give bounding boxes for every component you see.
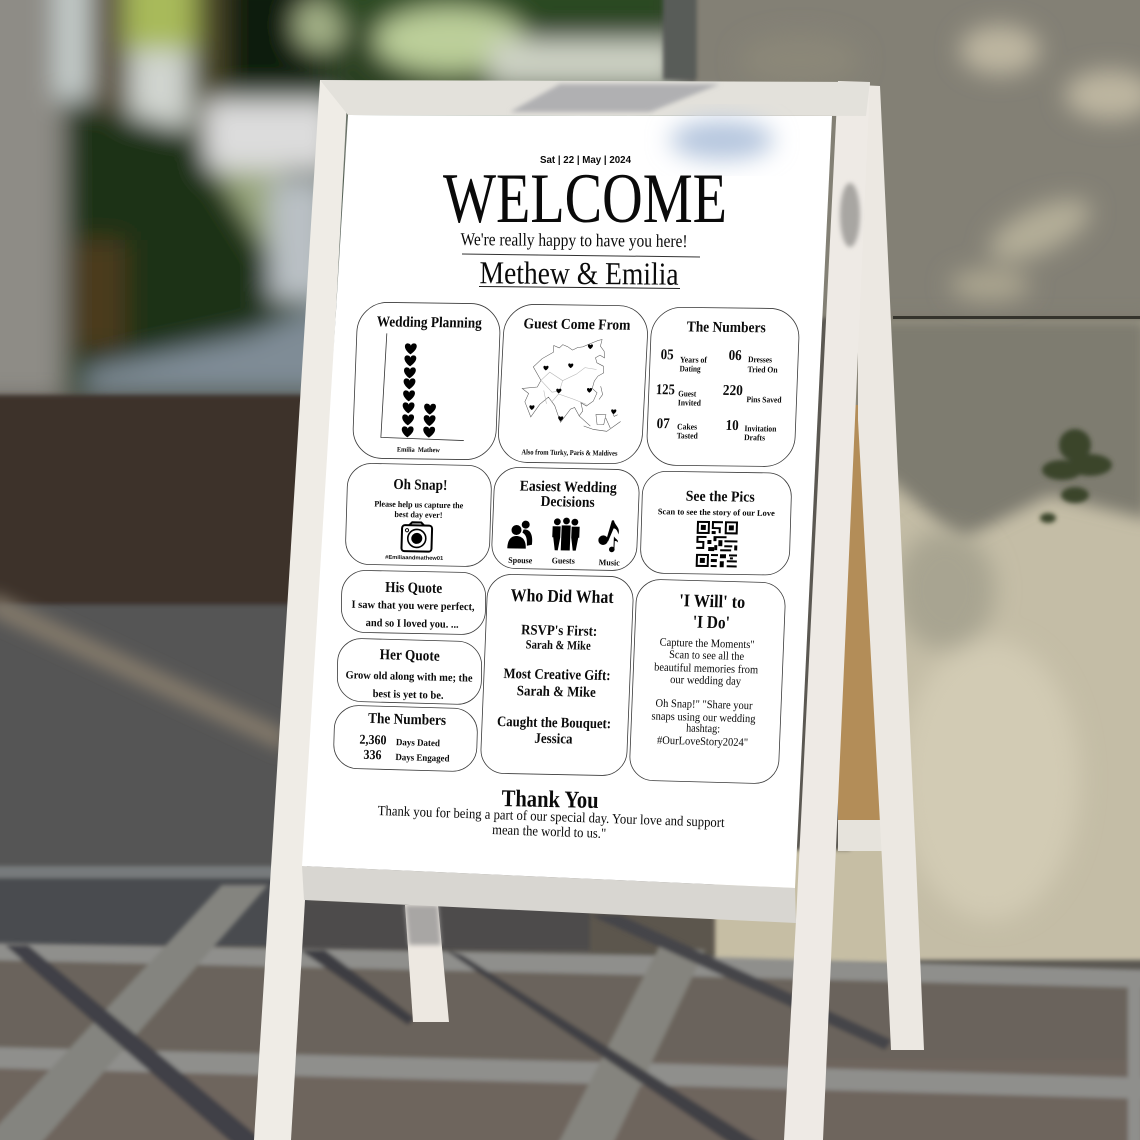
panel: I will to I do: beautiful memories from [654, 662, 758, 676]
panel: the numbers: The Numbers [686, 319, 766, 336]
panel: who did what: RSVP's First: [521, 622, 597, 640]
divider line [462, 254, 700, 257]
pavement [0, 885, 1140, 1140]
panel: guest come from: Guest Come From [523, 316, 631, 334]
panel: who did what: Sarah & Mike [525, 637, 591, 653]
panel: the numbers, days: The Numbers [368, 711, 446, 729]
panel: I will to I do: Scan to see all the [669, 649, 744, 663]
map of Asia [520, 338, 625, 431]
panel: the numbers: Cakes [677, 421, 698, 432]
panel: the numbers: Invited [678, 397, 701, 408]
panel: I will to I do: our wedding day [670, 674, 742, 688]
panel: who did what: Who Did What [510, 585, 614, 607]
panel: easiest wedding decisions: Music [599, 557, 620, 568]
panel: easiest wedding decisions: Decisions [540, 494, 595, 511]
panel: who did what [480, 574, 634, 776]
panel: oh snap: #Emiliaandmathew01 [385, 555, 443, 562]
panel: easiest wedding decisions: Guests [552, 555, 576, 566]
panel: the numbers: Tasted [677, 430, 698, 441]
name underline [479, 286, 680, 288]
panel: the numbers, days [333, 705, 478, 772]
moss on wall [1040, 429, 1112, 523]
panel: easiest wedding decisions: Spouse [508, 555, 533, 565]
icon: music [598, 520, 619, 552]
panel: his quote: and so I loved you. ... [366, 617, 459, 631]
chart: hearts pictogram [381, 333, 468, 441]
panel: the numbers, days: Days Dated [396, 738, 441, 749]
thank you message: mean the world to us." [492, 823, 606, 842]
title: welcome: WELCOME [443, 160, 727, 238]
panel: the numbers: Invitation [744, 423, 777, 434]
panel: the numbers: 06 [728, 348, 742, 364]
panel: see the pics: Scan to see the story of our Love [658, 506, 775, 518]
panel: the numbers: 07 [656, 416, 670, 432]
thank you heading: Thank You [501, 786, 599, 814]
thank you message: Thank you for being a part of our special day. Your love and support [377, 804, 725, 831]
panel: his quote: His Quote [385, 580, 443, 597]
panel: oh snap: Please help us capture the [374, 499, 464, 510]
icon: QR code [696, 521, 738, 567]
panel: her quote: best is yet to be. [373, 688, 444, 702]
panel: her quote [337, 638, 482, 705]
panel: the numbers: 125 [656, 382, 675, 398]
panel: I will to I do: #OurLoveStory2024" [657, 735, 748, 749]
board shadow [670, 120, 774, 160]
white sign board [302, 115, 832, 888]
panel: the numbers, days: Days Engaged [395, 753, 450, 765]
icon: spouse [507, 520, 533, 549]
panel: see the pics [640, 471, 792, 575]
panel: the numbers: 220 [723, 383, 743, 399]
thank you message [377, 804, 725, 842]
panel: the numbers: Tried On [747, 364, 778, 375]
panel: wedding planning [352, 302, 501, 460]
couple names: Methew & Emilia [479, 254, 679, 292]
panel: his quote [341, 570, 486, 635]
panel: I will to I do [629, 579, 786, 784]
date: Sat | 22 | May | 2024 [540, 155, 631, 166]
concrete wall [663, 0, 1140, 965]
panel: easiest wedding decisions: Easiest Wedding [519, 479, 618, 496]
blurred ground [0, 395, 320, 870]
panel: oh snap: best day ever! [394, 509, 443, 520]
panel: the numbers: 05 [660, 347, 674, 363]
panel: guest come from: Also from Turky, Paris & Maldives [521, 447, 618, 458]
icon: camera [401, 522, 432, 552]
panel: oh snap [345, 463, 492, 567]
panel: the numbers [646, 307, 800, 467]
panel: wedding planning: Emilia Mathew [397, 446, 441, 454]
easel front frame [254, 80, 870, 1140]
panel: his quote: I saw that you were perfect, [351, 599, 475, 613]
panel: the numbers: 10 [725, 418, 739, 434]
panel: the numbers: Pins Saved [746, 394, 782, 405]
panel: the numbers: Dating [679, 363, 702, 374]
panel: the numbers, days: 336 [363, 747, 382, 762]
panel: the numbers: Dresses [748, 354, 773, 364]
panel: I will to I do: Oh Snap!" "Share your [655, 698, 753, 712]
panel: the numbers: Guest [678, 388, 697, 399]
panel: see the pics: See the Pics [686, 489, 755, 506]
icon: guests [552, 517, 580, 551]
panel: I will to I do: 'I Will' to [679, 590, 746, 612]
panel: the numbers: Years of [680, 354, 707, 365]
panel: I will to I do: hashtag: [686, 722, 720, 735]
panel: I will to I do: 'I Do' [692, 612, 730, 633]
easel back legs and panel [405, 85, 924, 1050]
subtitle: We're really happy to have you here! [460, 229, 688, 251]
panel: who did what: Jessica [534, 731, 573, 748]
panel: her quote: Grow old along with me; the [345, 669, 473, 685]
panel: I will to I do: snaps using our wedding [651, 711, 756, 725]
panel: who did what: Most Creative Gift: [503, 666, 611, 684]
panel: I will to I do: Capture the Moments" [659, 637, 755, 651]
panel: who did what: Sarah & Mike [517, 683, 597, 701]
panel: wedding planning: Wedding Planning [376, 314, 482, 332]
panel: oh snap: Oh Snap! [393, 477, 448, 494]
panel: easiest wedding decisions [491, 467, 640, 571]
panel: the numbers: Drafts [744, 432, 766, 442]
panel: who did what: Caught the Bouquet: [497, 714, 611, 732]
panel: the numbers, days: 2,360 [359, 732, 387, 747]
panel: guest come from [497, 304, 649, 464]
panel: her quote: Her Quote [380, 647, 440, 665]
